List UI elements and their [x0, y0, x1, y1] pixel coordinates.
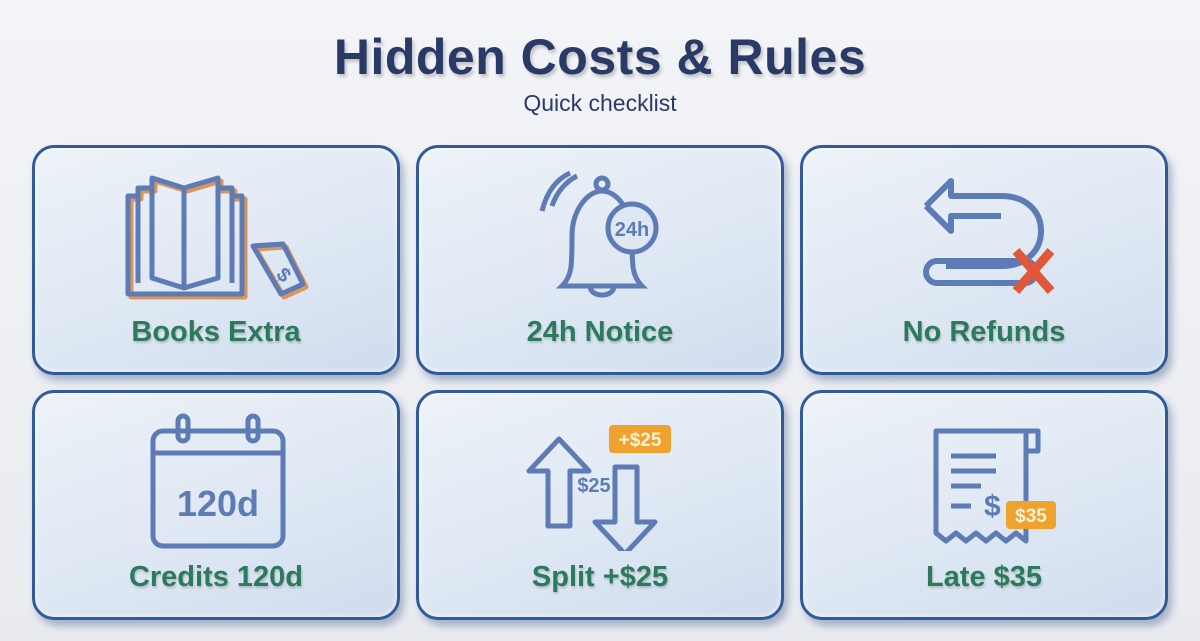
label: Books Extra: [131, 316, 301, 348]
icon: book with price tag: [126, 176, 308, 300]
label: Credits 120d: [129, 561, 303, 593]
panel: no refunds: [800, 145, 1168, 375]
icon: book with price tag: $: [272, 264, 295, 287]
icon: return arrow with X: [923, 178, 1054, 294]
label: No Refunds: [903, 316, 1065, 348]
icon: up/down arrows with $25: $25: [577, 475, 611, 497]
panel: credits 120d: [32, 390, 400, 620]
panel: split +$25: [416, 390, 784, 620]
panel: 24h notice: [416, 145, 784, 375]
title: Hidden Costs & Rules: [334, 29, 866, 85]
subtitle: Quick checklist: [523, 90, 677, 116]
icon: up/down arrows with $25: +$25: [619, 430, 662, 451]
panel: books extra: [32, 145, 400, 375]
label: 24h Notice: [527, 316, 673, 348]
icon: calendar 120d: 120d: [177, 483, 259, 524]
label: Late $35: [926, 561, 1042, 593]
icon: calendar 120d: [150, 414, 286, 548]
label: Split +$25: [532, 561, 668, 593]
icon: bell with 24h: 24h: [615, 219, 649, 241]
panel: late $35: [800, 390, 1168, 620]
icon: up/down arrows with $25: [526, 425, 671, 551]
icon: receipt with $35: $35: [1015, 506, 1047, 527]
icon: receipt with $35: $: [984, 490, 1001, 523]
icon: bell with 24h: [540, 170, 658, 298]
icon: receipt with $35: [934, 428, 1056, 544]
